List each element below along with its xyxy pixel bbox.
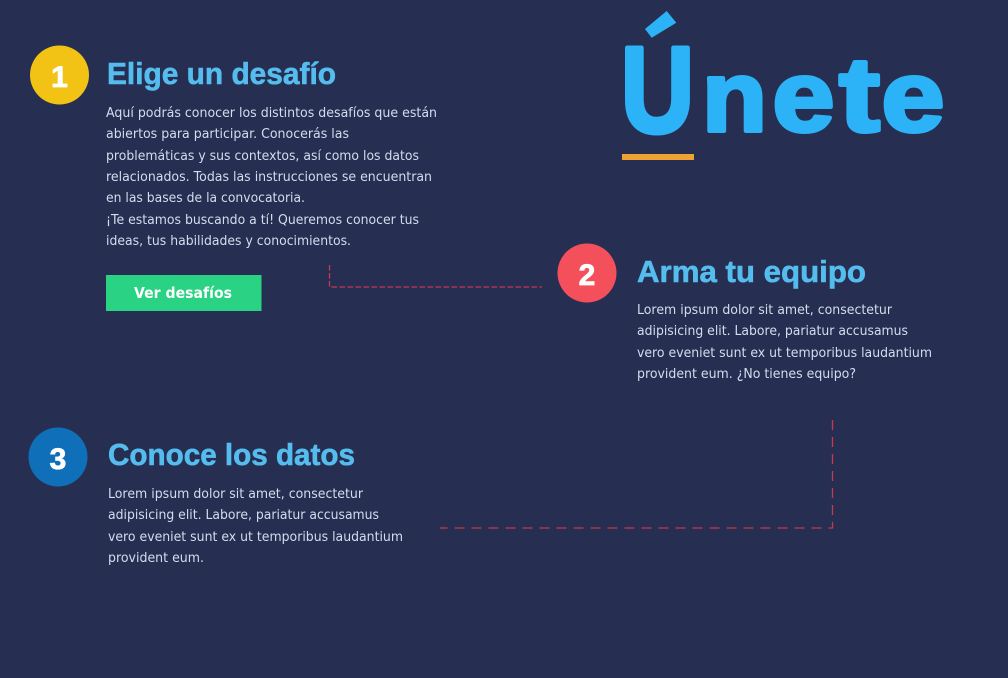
title: Únete: n: [702, 41, 767, 153]
button: Ver desafíos: Ver desafíos: [134, 284, 232, 302]
text block: step 1 description: ideas, tus habilidades y conocimientos.: [106, 234, 351, 249]
icon: number 2 badge: [558, 244, 616, 302]
text block: step 1 description: [106, 106, 437, 249]
panel: step 1: [30, 46, 437, 311]
icon: number 1 badge: [30, 46, 89, 104]
text block: step 1 description: ¡Te estamos buscando a tí! Queremos conocer tus: [106, 213, 419, 228]
icon: number 2 badge: 2: [579, 259, 595, 292]
text block: step 2 description: Lorem ipsum dolor sit amet, consectetur: [637, 303, 893, 318]
text block: step 2 description: adipisicing elit. Labore, pariatur accusamus: [637, 324, 908, 339]
title: Únete: t: [839, 36, 880, 154]
text block: step 2 description: [637, 303, 932, 382]
title underline: [622, 154, 694, 160]
text block: step 1 description: abiertos para participar. Conocerás las: [106, 127, 349, 142]
icon: number 3 badge: [28, 428, 88, 486]
title: Únete: Ú: [621, 22, 694, 158]
text block: step 3 description: vero eveniet sunt ex ut temporibus laudantium: [108, 530, 403, 545]
icon: number 3 badge: 3: [50, 443, 66, 476]
text block: step 1 description: problemáticas y sus contextos, así como los datos: [106, 149, 419, 164]
text block: step 2 description: vero eveniet sunt ex ut temporibus laudantium: [637, 346, 932, 361]
panel: step 2: [558, 244, 932, 382]
text block: step 2 description: provident eum. ¿No tienes equipo?: [637, 367, 856, 382]
text block: step 1 description: Aquí podrás conocer los distintos desafíos que están: [106, 106, 437, 121]
button: Ver desafíos: [106, 275, 262, 311]
title: Únete: [625, 11, 943, 136]
text block: step 1 description: en las bases de la convocatoria.: [106, 191, 305, 206]
text block: step 3 description: Lorem ipsum dolor sit amet, consectetur: [108, 487, 364, 502]
title: Únete: e: [882, 41, 944, 153]
icon: number 1 badge: 1: [51, 61, 68, 94]
text block: step 3 description: adipisicing elit. Labore, pariatur accusamus: [108, 508, 379, 523]
arrow: dashed connector from step 1 to step 2: [330, 265, 542, 287]
panel: step 3: [28, 428, 403, 566]
heading: Arma tu equipo: Arma tu equipo: [637, 254, 866, 289]
text block: step 1 description: relacionados. Todas las instrucciones se encuentran: [106, 170, 432, 185]
heading: Conoce los datos: Conoce los datos: [108, 437, 355, 472]
arrow: dashed connector from step 2 to step 3: [440, 420, 832, 528]
text block: step 3 description: [108, 487, 403, 566]
heading: Elige un desafío: Elige un desafío: [107, 56, 336, 91]
title: Únete: e: [772, 41, 834, 153]
text block: step 3 description: provident eum.: [108, 551, 204, 566]
